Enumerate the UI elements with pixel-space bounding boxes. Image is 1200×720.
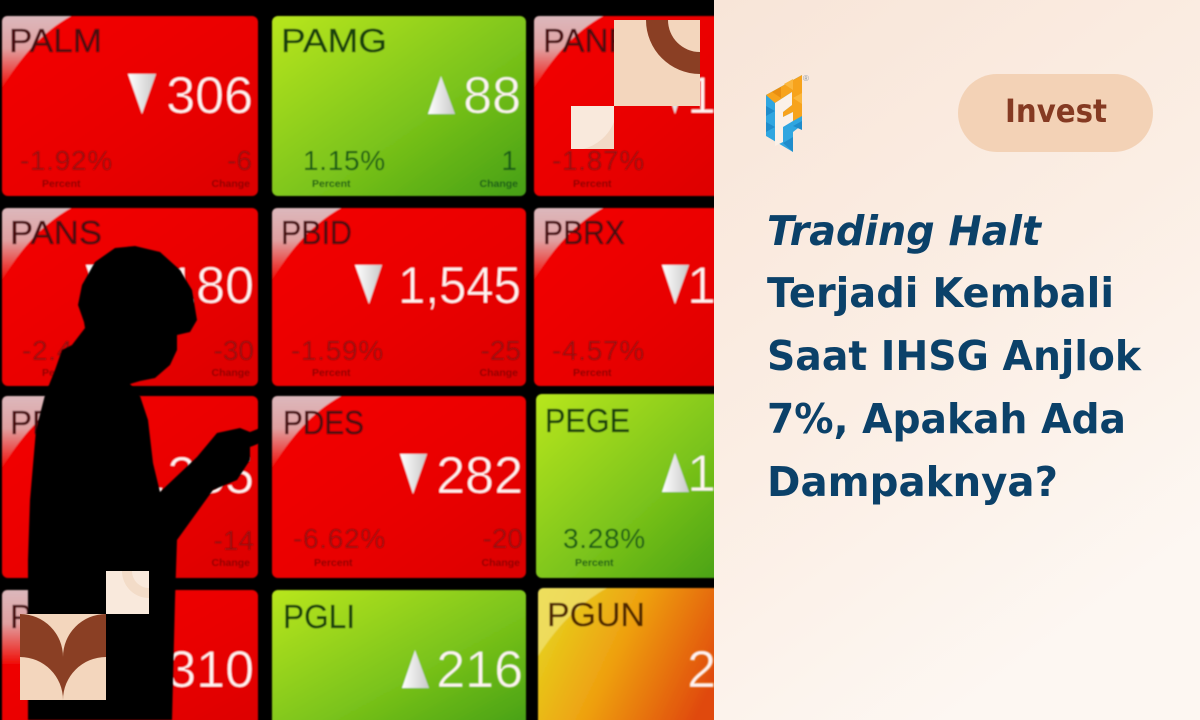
tile: PBID: -25 (481, 335, 521, 366)
registered mark: ® (803, 74, 809, 83)
tile: PGUN (538, 588, 734, 720)
tile: PGLI (272, 590, 526, 720)
tile: PDES: PDES (283, 404, 364, 441)
decoration: top squares (571, 20, 700, 149)
tile: PBRX (534, 208, 734, 386)
tile: PALM: Percent (42, 178, 81, 190)
tile: PAMG: 1.15% (303, 145, 386, 176)
tile: PANS: PANS (10, 214, 102, 251)
tile: PBRX: -4.57% (552, 335, 645, 366)
tile: fourth row left (2, 590, 258, 720)
tile: PALM: 306 (166, 67, 253, 125)
tile: PGLI: PGLI (283, 598, 355, 635)
tile: PALM: PALM (9, 22, 102, 59)
tile: PBRX: Percent (573, 367, 612, 379)
tile: PANS (2, 208, 258, 386)
icon: brand logo (766, 74, 809, 152)
panel: stock board (2, 16, 734, 720)
tile: PBRX: 1 (687, 257, 716, 315)
tile: PALM: -6 (227, 145, 252, 176)
tile: PAN: PANR (543, 22, 632, 59)
silhouette of person with phone (28, 246, 268, 720)
tile: PAN: Percent (573, 178, 612, 190)
tile: third row left: Change (211, 557, 250, 569)
title: Trading Halt (767, 207, 1042, 255)
tile: PEGE: Percent (575, 557, 614, 569)
title: Saat IHSG Anjlok (767, 332, 1143, 380)
tile: PBID: -1.59% (291, 335, 384, 366)
tile: PBID: PBID (281, 214, 352, 251)
tile: PAN (534, 16, 734, 196)
tile: PAN: 1 (687, 67, 716, 125)
title: Terjadi Kembali (767, 269, 1114, 317)
tile: PEGE (536, 394, 734, 578)
tile: PGUN: PGUN (547, 596, 645, 633)
tile: third row left: PB (10, 404, 54, 441)
tile: third row left: -14 (214, 525, 254, 556)
tile: PAMG: PAMG (281, 22, 387, 59)
tile: PAMG: Percent (312, 178, 351, 190)
tile: PANS: -30 (214, 335, 254, 366)
tile: PAN: -1.87% (552, 145, 645, 176)
title (767, 207, 1143, 506)
tile: PANS: Change (211, 367, 250, 379)
tile: PBID: Change (479, 367, 518, 379)
tile: PBRX: PBRX (543, 214, 625, 251)
tile: PAMG: 1 (501, 145, 517, 176)
tile: PAMG (272, 16, 526, 196)
tile: PBID: 1,545 (398, 257, 521, 315)
tile: third row left (2, 396, 258, 578)
tile: PGUN: 2 (687, 641, 716, 699)
category pill: Invest (958, 74, 1153, 152)
tile: PBID: Percent (312, 367, 351, 379)
category pill: Invest: Invest (1005, 92, 1107, 130)
tile: PANS: -2.40% (22, 335, 115, 366)
tile: PALM: -1.92% (20, 145, 113, 176)
title: Dampaknya? (767, 458, 1058, 506)
decoration: bottom squares (20, 571, 149, 700)
tile: PANS: 180 (167, 257, 254, 315)
tile: third row left: 1,235 (124, 447, 254, 505)
tile: PGLI: 216 (436, 641, 523, 699)
photo background (0, 0, 714, 720)
tile: PBID (272, 208, 526, 386)
tile: PDES: -6.62% (293, 523, 386, 554)
tile: PANS: Percent (42, 367, 81, 379)
tile: fourth row left: 310 (167, 641, 254, 699)
tile: PALM (2, 16, 258, 196)
panel: right text background (714, 0, 1200, 720)
tile: PEGE: 3.28% (563, 523, 646, 554)
tile: PDES (272, 396, 526, 578)
tile: PDES: Change (481, 557, 520, 569)
tile: PAMG: Change (479, 178, 518, 190)
tile: PAMG: 88 (463, 67, 521, 125)
tile: PEGE: 1 (687, 445, 716, 503)
tile: PDES: 282 (436, 447, 523, 505)
title: 7%, Apakah Ada (767, 395, 1126, 443)
tile: PALM: Change (211, 178, 250, 190)
tile: PDES: Percent (314, 557, 353, 569)
tile: PEGE: PEGE (545, 402, 630, 439)
tile: PDES: -20 (483, 523, 523, 554)
tile: fourth row left: PB (10, 598, 54, 635)
